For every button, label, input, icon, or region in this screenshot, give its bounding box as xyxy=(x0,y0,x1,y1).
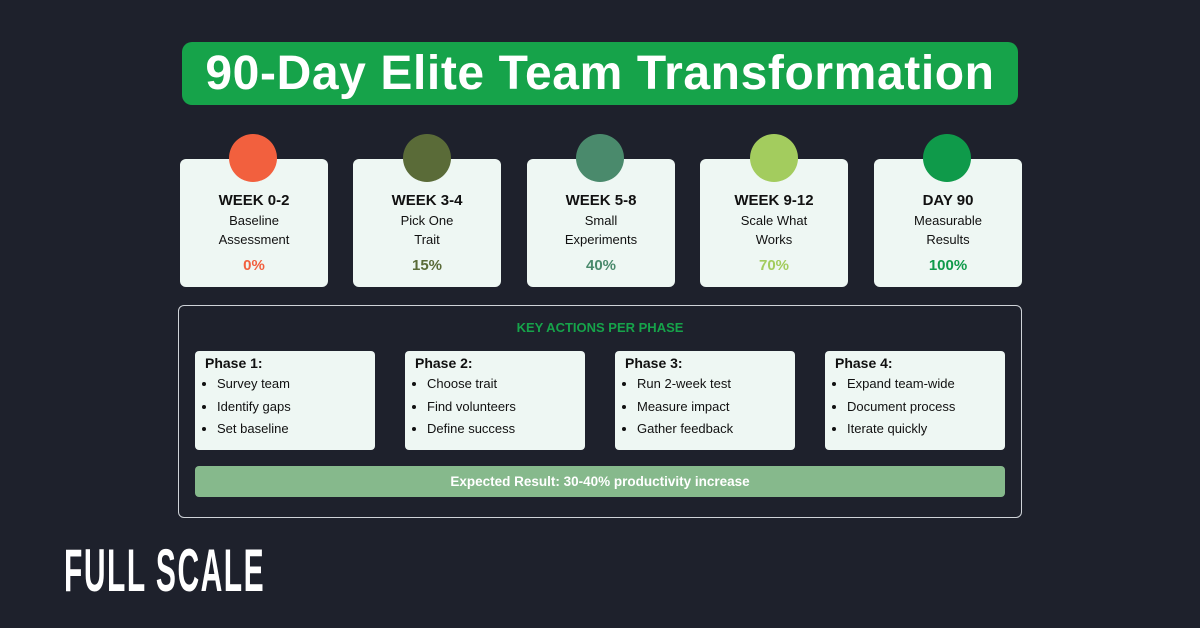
card: week 0-2: Assessment xyxy=(219,232,289,247)
card: day 90: DAY 90 xyxy=(923,192,973,209)
card: week 3-4: WEEK 3-4 xyxy=(392,192,462,209)
card: week 5-8: Small xyxy=(585,213,617,228)
card: week 0-2: Baseline xyxy=(229,213,279,228)
card: week 5-8: WEEK 5-8 xyxy=(566,192,636,209)
phase 3: Gather feedback xyxy=(637,421,733,436)
heading: KEY ACTIONS PER PHASE xyxy=(517,320,683,335)
icon: circle 1 xyxy=(229,134,277,182)
card: week 9-12: 70% xyxy=(759,257,789,274)
result bar xyxy=(195,466,1005,497)
phase 4: Document process xyxy=(847,398,955,414)
phase 4: Phase 4: xyxy=(835,355,893,371)
phase 4: Expand team-wide xyxy=(847,376,955,391)
card: week 5-8: Experiments xyxy=(565,232,637,247)
phase 1: Identify gaps xyxy=(217,398,291,414)
icon: circle 4 xyxy=(750,134,798,182)
phase 3: Phase 3: xyxy=(625,355,683,371)
card: week 9-12: WEEK 9-12 xyxy=(734,192,814,209)
card: week 3-4: Trait xyxy=(414,232,440,247)
card: week 9-12 xyxy=(700,159,848,287)
panel: key actions xyxy=(178,305,1022,518)
card: day 90: Measurable xyxy=(914,213,982,228)
card: week 0-2: 0% xyxy=(243,257,265,274)
card: week 9-12: Works xyxy=(756,232,792,247)
card: week 3-4: Pick One xyxy=(401,213,453,228)
phase 2: Choose trait xyxy=(427,376,497,391)
card: day 90: Results xyxy=(926,232,970,247)
icon: circle 2 xyxy=(403,134,451,182)
card: week 5-8 xyxy=(527,159,675,287)
phase 2: Phase 2: xyxy=(415,355,473,371)
phase 1 xyxy=(195,351,375,450)
phase 3: Run 2-week test xyxy=(637,376,731,391)
phase 1: Set baseline xyxy=(217,421,289,436)
card: day 90: 100% xyxy=(929,257,967,274)
card: week 9-12: Scale What xyxy=(741,213,807,228)
phase 1: Phase 1: xyxy=(205,355,263,371)
phase 4: Iterate quickly xyxy=(847,421,927,436)
title: 90-Day Elite Team Transformation xyxy=(205,47,995,100)
card: week 0-2: WEEK 0-2 xyxy=(219,192,289,209)
card: week 5-8: 40% xyxy=(586,257,616,274)
card: week 0-2 xyxy=(180,159,328,287)
phase 2: Find volunteers xyxy=(427,398,516,414)
phase 3 xyxy=(615,351,795,450)
icon: circle 5 xyxy=(923,134,971,182)
result bar: Expected Result: 30-40% productivity increase xyxy=(450,474,750,489)
card: week 3-4: 15% xyxy=(412,257,442,274)
card: week 3-4 xyxy=(353,159,501,287)
phase 2: Define success xyxy=(427,421,515,436)
phase 2 xyxy=(405,351,585,450)
logo: FULL SCALE xyxy=(64,537,265,604)
phase 3: Measure impact xyxy=(637,398,729,414)
card: day 90 xyxy=(874,159,1022,287)
icon: circle 3 xyxy=(576,134,624,182)
phase 1: Survey team xyxy=(217,376,290,391)
phase 4 xyxy=(825,351,1005,450)
